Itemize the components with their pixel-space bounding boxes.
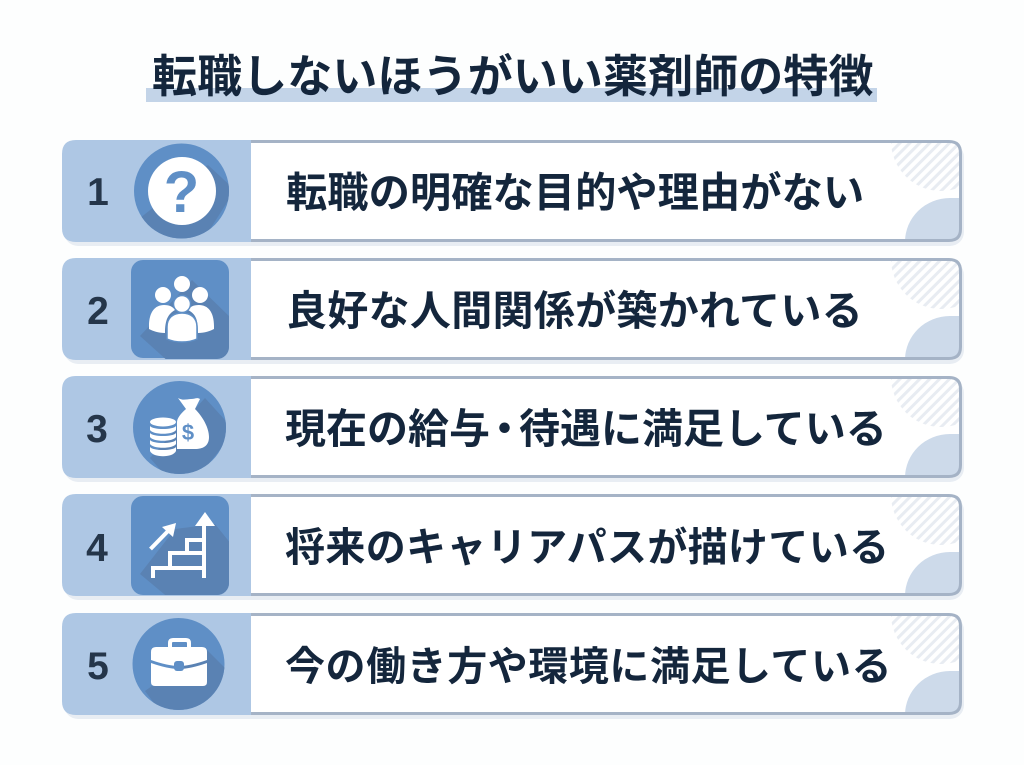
number: 3: [86, 408, 108, 451]
panel: item 3: [62, 376, 964, 482]
number: 1: [87, 171, 109, 214]
icon: question mark: ?: [164, 160, 199, 225]
icon: stairs and arrows: [131, 496, 235, 599]
item text: 良好な人間関係が築かれている: [286, 288, 863, 334]
icon: briefcase: [132, 618, 224, 710]
panel: item 1: [62, 140, 964, 246]
title: 転職しないほうがいい薬剤師の特徴: [152, 51, 874, 102]
item text: 現在の給与・待遇に満足している: [285, 406, 887, 452]
number: 4: [86, 527, 108, 570]
icon: money bag and coins: $: [182, 420, 194, 445]
number: 5: [87, 645, 109, 688]
icon: group of people: [131, 260, 235, 363]
item text: 転職の明確な目的や理由がない: [286, 170, 864, 216]
panel: item 2: [62, 258, 964, 364]
number: 2: [87, 290, 109, 333]
panel: item 5: [62, 613, 964, 719]
icon: money bag and coins: [133, 381, 226, 474]
item text: 将来のキャリアパスが描けている: [285, 526, 889, 570]
panel: item 4: [62, 494, 964, 600]
icon: question mark: [134, 144, 229, 238]
item text: 今の働き方や環境に満足している: [285, 645, 892, 689]
